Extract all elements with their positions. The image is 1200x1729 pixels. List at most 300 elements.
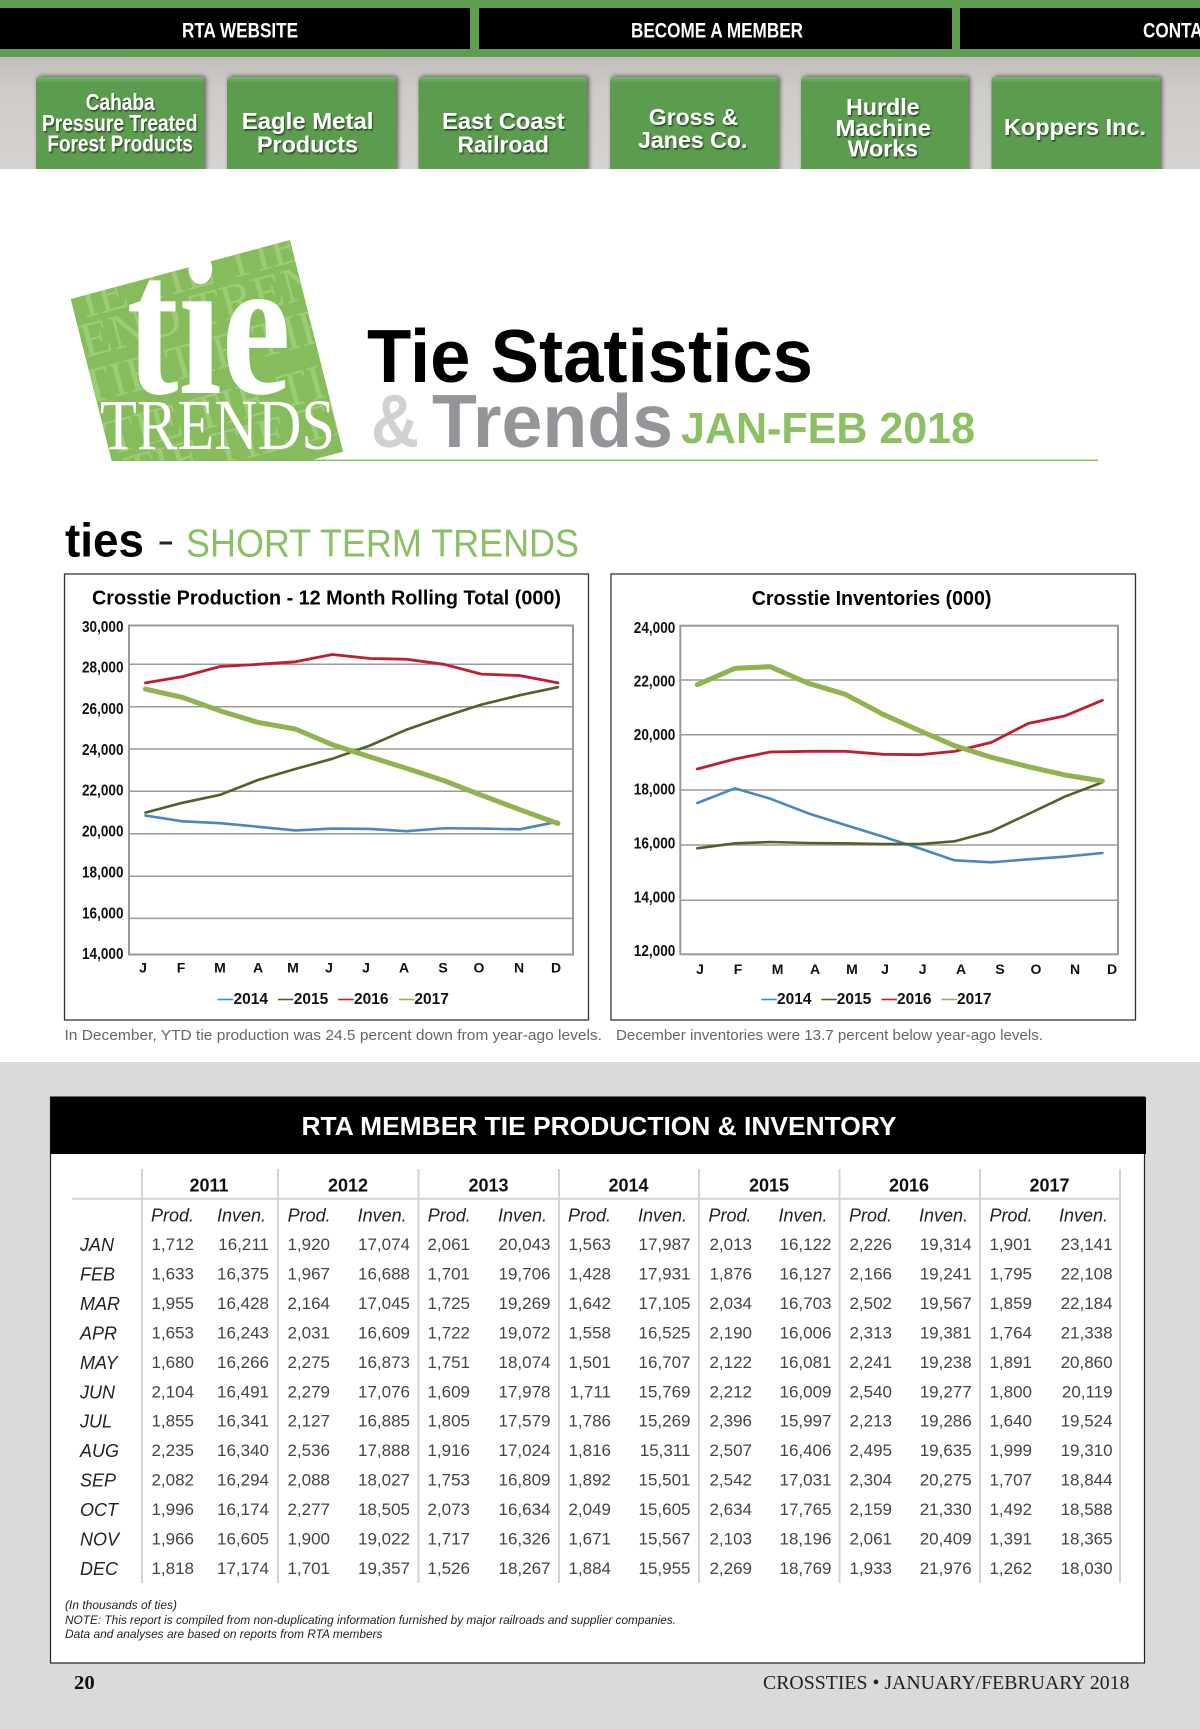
member company buttons: Railroad — [458, 132, 549, 158]
table data rows: 17,888 — [358, 1441, 410, 1460]
data lines: inventories — [697, 667, 1102, 862]
table data rows: 1,966 — [151, 1530, 194, 1548]
table data rows: 15,955 — [638, 1559, 690, 1578]
table data rows: 19,269 — [498, 1294, 550, 1313]
x axis month labels: production — [139, 960, 561, 976]
table data rows: 2,166 — [849, 1264, 892, 1284]
table footnotes — [65, 1600, 676, 1641]
panel: crosstie production chart — [64, 574, 588, 1020]
table data rows: 1,891 — [989, 1353, 1032, 1372]
table data rows: 1,753 — [427, 1471, 470, 1490]
column sub-headers: Inven. — [778, 1206, 828, 1226]
table data rows: 16,009 — [780, 1382, 832, 1401]
x axis month labels: inventories: M — [846, 961, 858, 977]
table data rows: 2,226 — [849, 1235, 892, 1254]
table data rows: 2,082 — [151, 1471, 194, 1490]
table data rows: 16,211 — [218, 1235, 269, 1254]
x axis month labels: production: N — [514, 960, 524, 976]
table data rows: 16,174 — [217, 1500, 269, 1519]
year headers: 2015 — [749, 1176, 789, 1196]
table data rows: 16,609 — [358, 1323, 410, 1342]
table data rows: 17,765 — [780, 1500, 832, 1519]
table data rows: 1,501 — [568, 1353, 611, 1372]
table data rows: 17,174 — [217, 1559, 269, 1578]
legend: inventories: 2014 — [777, 991, 812, 1008]
table data rows: 17,074 — [358, 1235, 410, 1254]
column sub-headers: Inven. — [498, 1206, 547, 1226]
table data rows: 15,997 — [780, 1412, 832, 1431]
table data rows: 16,707 — [638, 1353, 690, 1372]
legend: production: 2016 — [354, 991, 389, 1008]
table data rows: 16,428 — [217, 1294, 269, 1313]
table data rows: 1,428 — [568, 1264, 611, 1284]
table data rows: 2,634 — [709, 1500, 752, 1519]
table footnotes: NOTE: This report is compiled from non-duplicating information furnished by major railroads and supplier companies. — [65, 1615, 676, 1627]
table data rows: 1,805 — [427, 1412, 470, 1431]
legend: inventories: 2016 — [897, 991, 932, 1008]
table data rows: 1,764 — [989, 1323, 1032, 1342]
table data rows: 2,212 — [709, 1382, 752, 1401]
table data rows: 16,688 — [358, 1264, 410, 1284]
publication footer: CROSSTIES • JANUARY/FEBRUARY 2018 — [763, 1672, 1130, 1694]
table data rows: 1,855 — [151, 1412, 194, 1431]
top navigation bar: BECOME A MEMBER — [631, 20, 803, 42]
table data rows: 2,304 — [849, 1471, 892, 1490]
data lines: production — [145, 654, 558, 831]
table data rows: 1,558 — [568, 1323, 611, 1342]
month labels: SEP — [80, 1471, 116, 1491]
x axis month labels: production: J — [362, 960, 370, 976]
column sub-headers: Prod. — [428, 1206, 471, 1226]
page title — [308, 314, 1098, 463]
x axis month labels: inventories: F — [734, 961, 743, 977]
table data rows: 16,703 — [780, 1294, 832, 1313]
x axis month labels: inventories: O — [1031, 961, 1042, 977]
table data rows: 18,267 — [498, 1559, 550, 1578]
member company buttons — [0, 57, 1200, 169]
member company buttons: Forest Products — [47, 131, 193, 157]
x axis month labels: inventories: J — [696, 961, 704, 977]
page title: & — [371, 379, 419, 463]
month labels: AUG — [79, 1441, 119, 1461]
month labels: NOV — [80, 1530, 121, 1550]
gray lower background — [0, 1062, 1200, 1729]
column sub-headers: Prod. — [288, 1206, 331, 1226]
year headers: 2016 — [889, 1176, 929, 1196]
legend: inventories: 2015 — [837, 991, 872, 1008]
member company buttons: Hurdle — [846, 94, 920, 120]
x axis month labels: production: F — [177, 960, 186, 976]
section heading: short term trends — [65, 514, 579, 566]
table data rows: 20,860 — [1061, 1353, 1113, 1372]
column sub-headers: Prod. — [708, 1206, 752, 1226]
table data rows: 2,277 — [287, 1500, 330, 1519]
table data rows: 16,340 — [217, 1441, 269, 1460]
tie trends logo: TRENDS — [100, 385, 335, 465]
year headers: 2013 — [468, 1176, 509, 1196]
table data rows: 16,122 — [780, 1235, 832, 1254]
table data rows: 18,027 — [358, 1471, 410, 1490]
table data rows: 2,495 — [849, 1441, 892, 1460]
table data rows: 17,987 — [638, 1235, 690, 1254]
table data rows: 17,024 — [498, 1441, 550, 1460]
table data rows: 1,722 — [427, 1323, 470, 1342]
table data rows: 1,876 — [709, 1264, 752, 1284]
table data rows: 1,916 — [427, 1441, 470, 1460]
table data rows: 16,294 — [217, 1471, 269, 1490]
panel: member tie production and inventory table — [50, 1097, 1146, 1663]
table data rows: 18,588 — [1061, 1500, 1113, 1519]
table data rows: 1,717 — [427, 1530, 470, 1548]
y axis labels: inventories — [634, 620, 675, 960]
y axis labels: inventories: 20,000 — [634, 727, 675, 744]
y axis labels: inventories: 22,000 — [634, 674, 675, 690]
legend: inventories: 2017 — [957, 991, 992, 1008]
section heading: short term trends: SHORT TERM TRENDS — [186, 523, 579, 566]
table data rows: 19,357 — [358, 1559, 410, 1578]
table data rows: 15,605 — [638, 1500, 690, 1519]
x axis month labels: inventories — [696, 961, 1117, 977]
table data rows: 19,524 — [1061, 1412, 1113, 1431]
tie trends logo: TIE TIE TIE TIE TIE — [118, 334, 553, 501]
table data rows: 1,920 — [287, 1235, 330, 1254]
table header banner: RTA MEMBER TIE PRODUCTION & INVENTORY — [302, 1113, 896, 1141]
column sub-headers: Inven. — [358, 1206, 407, 1226]
table data rows: 2,122 — [709, 1353, 752, 1372]
table data rows: 22,184 — [1061, 1294, 1113, 1313]
table data rows: 19,314 — [920, 1235, 972, 1254]
y axis labels: inventories: 12,000 — [634, 943, 675, 960]
column sub-headers: Prod. — [990, 1206, 1033, 1226]
y axis labels: production: 26,000 — [82, 701, 124, 718]
table data rows: 2,013 — [709, 1235, 752, 1254]
y axis labels: inventories: 18,000 — [634, 782, 675, 798]
page number: 20 — [74, 1672, 95, 1694]
column sub-headers: Inven. — [1059, 1206, 1108, 1226]
table data rows: 1,967 — [287, 1264, 330, 1284]
page title: Trends — [432, 379, 673, 463]
table data rows: 2,127 — [287, 1412, 330, 1431]
table data rows: 1,526 — [427, 1559, 470, 1578]
column sub-headers: Inven. — [217, 1206, 266, 1226]
x axis month labels: inventories: M — [772, 961, 783, 977]
table data rows: 18,365 — [1061, 1530, 1113, 1548]
table data rows: 2,190 — [709, 1323, 752, 1342]
legend: production: 2014 — [234, 991, 268, 1008]
table data rows: 1,859 — [989, 1294, 1032, 1313]
table data rows: 18,769 — [780, 1559, 832, 1578]
y axis labels: production: 20,000 — [82, 823, 124, 840]
table data rows: 2,507 — [709, 1441, 752, 1460]
table data rows: 17,076 — [358, 1382, 410, 1401]
x axis month labels: production: M — [287, 960, 299, 976]
table data rows: 22,108 — [1061, 1264, 1113, 1284]
member company buttons: Products — [257, 132, 358, 158]
y axis labels: inventories: 16,000 — [634, 836, 675, 852]
month labels: JAN — [79, 1235, 115, 1255]
x axis month labels: inventories: N — [1070, 961, 1080, 977]
member company buttons: Works — [848, 136, 918, 162]
table data rows: 1,786 — [568, 1412, 611, 1431]
table data rows: 23,141 — [1061, 1235, 1113, 1254]
table data rows: 19,241 — [920, 1264, 972, 1284]
year headers: 2014 — [608, 1176, 649, 1196]
table data rows: 2,540 — [849, 1382, 892, 1401]
table data rows: 17,978 — [498, 1382, 550, 1401]
chart title: inventories: Crosstie Inventories (000) — [752, 587, 991, 610]
table data rows: 1,996 — [151, 1500, 194, 1519]
table data rows: 2,241 — [849, 1353, 892, 1372]
table data rows: 1,262 — [989, 1559, 1032, 1578]
x axis month labels: production: A — [253, 960, 263, 976]
tie trends logo: END TREND TREND — [73, 196, 531, 369]
table data rows: 16,605 — [217, 1530, 269, 1548]
table data rows: 15,501 — [638, 1471, 690, 1490]
table data rows: 1,800 — [989, 1382, 1032, 1401]
table data rows: 18,505 — [358, 1500, 410, 1519]
table data rows: 1,955 — [151, 1294, 194, 1313]
table data rows: 1,818 — [151, 1559, 194, 1578]
year headers: 2011 — [189, 1176, 229, 1196]
table data rows: 17,931 — [638, 1264, 690, 1284]
table data rows: 16,885 — [358, 1412, 410, 1431]
y axis labels: production: 22,000 — [82, 782, 124, 800]
table data rows: 20,043 — [498, 1235, 550, 1254]
member company buttons: East Coast — [442, 108, 565, 134]
y axis labels: production: 18,000 — [82, 864, 124, 881]
table data rows: 1,712 — [151, 1235, 194, 1254]
x axis month labels: inventories: A — [810, 961, 820, 977]
table data rows: 16,326 — [498, 1530, 550, 1548]
member company buttons: Machine — [836, 115, 931, 141]
y axis labels: production: 28,000 — [82, 660, 124, 677]
member company buttons: Janes Co. — [638, 127, 748, 153]
column sub-headers: Prod. — [849, 1206, 892, 1226]
x axis month labels: production: M — [214, 960, 226, 976]
table data rows: 1,725 — [427, 1294, 470, 1313]
table data rows: 1,816 — [568, 1441, 611, 1460]
column sub-headers: Prod. — [151, 1206, 194, 1226]
legend: production: 2015 — [294, 991, 329, 1008]
table data rows: 17,031 — [780, 1471, 832, 1490]
table data rows: 2,049 — [568, 1500, 611, 1519]
y axis labels: inventories: 14,000 — [634, 890, 675, 906]
chart title: production: Crosstie Production - 12 Month Rolling Total (000) — [92, 586, 561, 609]
x axis month labels: production: D — [551, 960, 561, 976]
table data rows: 1,900 — [287, 1530, 330, 1548]
member company buttons: Cahaba — [86, 89, 155, 115]
table data rows: 20,275 — [920, 1471, 972, 1490]
y axis labels: inventories: 24,000 — [634, 620, 675, 637]
month labels: MAY — [80, 1353, 120, 1373]
x axis month labels: inventories: D — [1107, 961, 1117, 977]
table data rows: 16,341 — [217, 1412, 269, 1431]
table data rows: 2,536 — [287, 1441, 330, 1460]
x axis month labels: production: O — [474, 960, 485, 976]
table data rows: 16,266 — [217, 1353, 269, 1372]
table data rows: 1,901 — [989, 1235, 1032, 1254]
x axis month labels: production: J — [139, 960, 147, 976]
tie trends logo: IE TIE TIE TREND — [73, 170, 478, 329]
table footnotes: (In thousands of ties) — [65, 1600, 177, 1612]
caption: inventories: December inventories were 13.7 percent below year-ago levels. — [616, 1028, 1043, 1044]
table data rows: 21,338 — [1061, 1323, 1113, 1342]
table data rows: 1,563 — [568, 1235, 611, 1254]
legend: production: 2017 — [414, 991, 449, 1008]
y axis labels: production: 24,000 — [82, 742, 124, 759]
x axis month labels: production: J — [325, 960, 333, 976]
table data rows: 1,701 — [287, 1559, 330, 1578]
x axis month labels: inventories: J — [919, 961, 926, 977]
table data rows: 19,635 — [920, 1441, 972, 1460]
table data rows: 2,235 — [151, 1441, 194, 1460]
table data rows: 20,409 — [920, 1530, 972, 1548]
member company buttons: Koppers Inc. — [1004, 114, 1146, 140]
table data rows: 2,542 — [709, 1471, 752, 1490]
legend: production — [218, 991, 449, 1008]
tie trends logo: TIE TIE TIE TIE TIE — [98, 299, 533, 466]
caption: production: In December, YTD tie production was 24.5 percent down from year-ago levels. — [64, 1028, 602, 1044]
table data rows: 2,502 — [849, 1294, 892, 1313]
y axis labels: production: 14,000 — [82, 946, 124, 963]
page title: Tie Statistics — [367, 314, 813, 398]
table data rows: 2,061 — [849, 1530, 892, 1548]
table data rows: 16,081 — [780, 1353, 832, 1372]
table data rows: 2,088 — [287, 1471, 330, 1490]
table data rows: 1,633 — [151, 1264, 194, 1284]
table data rows: 2,034 — [709, 1294, 752, 1313]
table data rows: 16,491 — [217, 1382, 269, 1401]
table data rows: 17,105 — [638, 1294, 690, 1313]
table data rows: 18,074 — [498, 1353, 550, 1372]
table data rows: 2,061 — [427, 1235, 470, 1254]
month labels: MAR — [80, 1294, 120, 1314]
month labels: OCT — [80, 1500, 120, 1520]
table data rows: 19,238 — [920, 1353, 972, 1372]
table data rows: 1,642 — [568, 1294, 611, 1313]
member company buttons: Eagle Metal — [242, 108, 373, 134]
table data rows: 18,844 — [1061, 1471, 1113, 1490]
table header banner — [50, 1097, 1146, 1154]
table data rows: 16,006 — [780, 1323, 832, 1342]
table data rows: 17,579 — [498, 1412, 550, 1431]
table data rows: 15,269 — [638, 1412, 690, 1431]
table data rows: 1,795 — [989, 1264, 1032, 1284]
column sub-headers: Inven. — [919, 1206, 968, 1226]
x axis month labels: inventories: J — [881, 961, 889, 977]
table data rows: 16,243 — [217, 1323, 269, 1342]
y axis labels: production: 16,000 — [82, 905, 124, 922]
column sub-headers — [151, 1206, 1108, 1226]
table data rows: 19,277 — [920, 1382, 972, 1401]
y axis labels: production: 30,000 — [82, 619, 124, 636]
y axis labels: production — [82, 619, 124, 963]
table data rows: 2,279 — [287, 1382, 330, 1401]
table data rows — [151, 1235, 1113, 1578]
year headers: 2012 — [328, 1176, 368, 1196]
table data rows: 21,330 — [920, 1500, 972, 1519]
top navigation bar: RTA WEBSITE — [182, 20, 298, 42]
month labels: APR — [79, 1323, 117, 1343]
table data rows: 2,031 — [287, 1323, 330, 1342]
table data rows: 19,310 — [1061, 1441, 1113, 1460]
table data rows: 1,640 — [989, 1412, 1032, 1431]
table data rows: 16,809 — [498, 1471, 550, 1490]
legend: inventories — [761, 991, 992, 1008]
table data rows: 1,680 — [151, 1353, 194, 1372]
column sub-headers: Prod. — [568, 1206, 611, 1226]
table data rows: 19,286 — [920, 1412, 972, 1431]
table data rows: 2,396 — [709, 1412, 752, 1431]
page title: JAN-FEB 2018 — [681, 404, 975, 453]
table data rows: 19,567 — [920, 1294, 972, 1313]
table data rows: 1,391 — [989, 1530, 1032, 1548]
table data rows: 1,711 — [570, 1382, 611, 1401]
table data rows: 1,701 — [427, 1264, 470, 1284]
table data rows: 16,406 — [780, 1441, 832, 1460]
table data rows: 2,275 — [287, 1353, 330, 1372]
month labels: DEC — [80, 1559, 119, 1579]
table data rows: 2,159 — [849, 1500, 892, 1519]
table data rows: 1,999 — [989, 1441, 1032, 1460]
table data rows: 18,196 — [780, 1530, 832, 1548]
table data rows: 1,653 — [151, 1323, 194, 1342]
year headers: 2017 — [1029, 1176, 1070, 1196]
table data rows: 2,103 — [709, 1530, 752, 1548]
tie trends logo: TIE TIE TIE TIE TIE — [73, 249, 508, 416]
tie trends logo — [70, 240, 343, 461]
table data rows: 1,609 — [427, 1382, 470, 1401]
table data rows: 1,492 — [989, 1500, 1032, 1519]
table data rows: 15,769 — [638, 1382, 690, 1401]
column sub-headers: Inven. — [638, 1206, 687, 1226]
table data rows: 2,164 — [287, 1294, 330, 1313]
table data rows: 20,119 — [1062, 1382, 1113, 1401]
x axis month labels: production: S — [438, 960, 448, 976]
top navigation bar — [0, 0, 1200, 57]
table data rows: 19,706 — [498, 1264, 550, 1284]
table data rows: 15,567 — [638, 1530, 690, 1548]
table data rows: 1,884 — [568, 1559, 611, 1578]
table data rows: 21,976 — [920, 1559, 972, 1578]
table data rows: 2,104 — [151, 1382, 194, 1401]
table data rows: 2,073 — [427, 1500, 470, 1519]
month labels: JUL — [79, 1412, 112, 1432]
table data rows: 17,045 — [358, 1294, 410, 1313]
month labels: JUN — [79, 1382, 116, 1402]
table data rows: 15,311 — [640, 1441, 690, 1460]
table data rows: 19,381 — [920, 1323, 972, 1342]
table data rows: 2,313 — [849, 1323, 892, 1342]
table data rows: 1,892 — [568, 1471, 611, 1490]
month labels: FEB — [80, 1264, 115, 1284]
month labels — [79, 1235, 121, 1579]
section heading: short term trends: ties — [65, 514, 144, 566]
table data rows: 16,525 — [638, 1323, 690, 1342]
table data rows: 18,030 — [1061, 1559, 1113, 1578]
table data rows: 19,022 — [358, 1530, 410, 1548]
x axis month labels: production: A — [399, 960, 409, 976]
table data rows: 1,751 — [427, 1353, 470, 1372]
table data rows: 1,933 — [849, 1559, 892, 1578]
tie trends logo: tie — [127, 216, 291, 437]
table data rows: 16,634 — [498, 1500, 550, 1519]
table data rows: 16,127 — [780, 1264, 832, 1284]
table data rows: 1,671 — [568, 1530, 611, 1548]
table data rows: 16,873 — [358, 1353, 410, 1372]
year headers — [189, 1176, 1070, 1196]
table data rows: 2,269 — [709, 1559, 752, 1578]
